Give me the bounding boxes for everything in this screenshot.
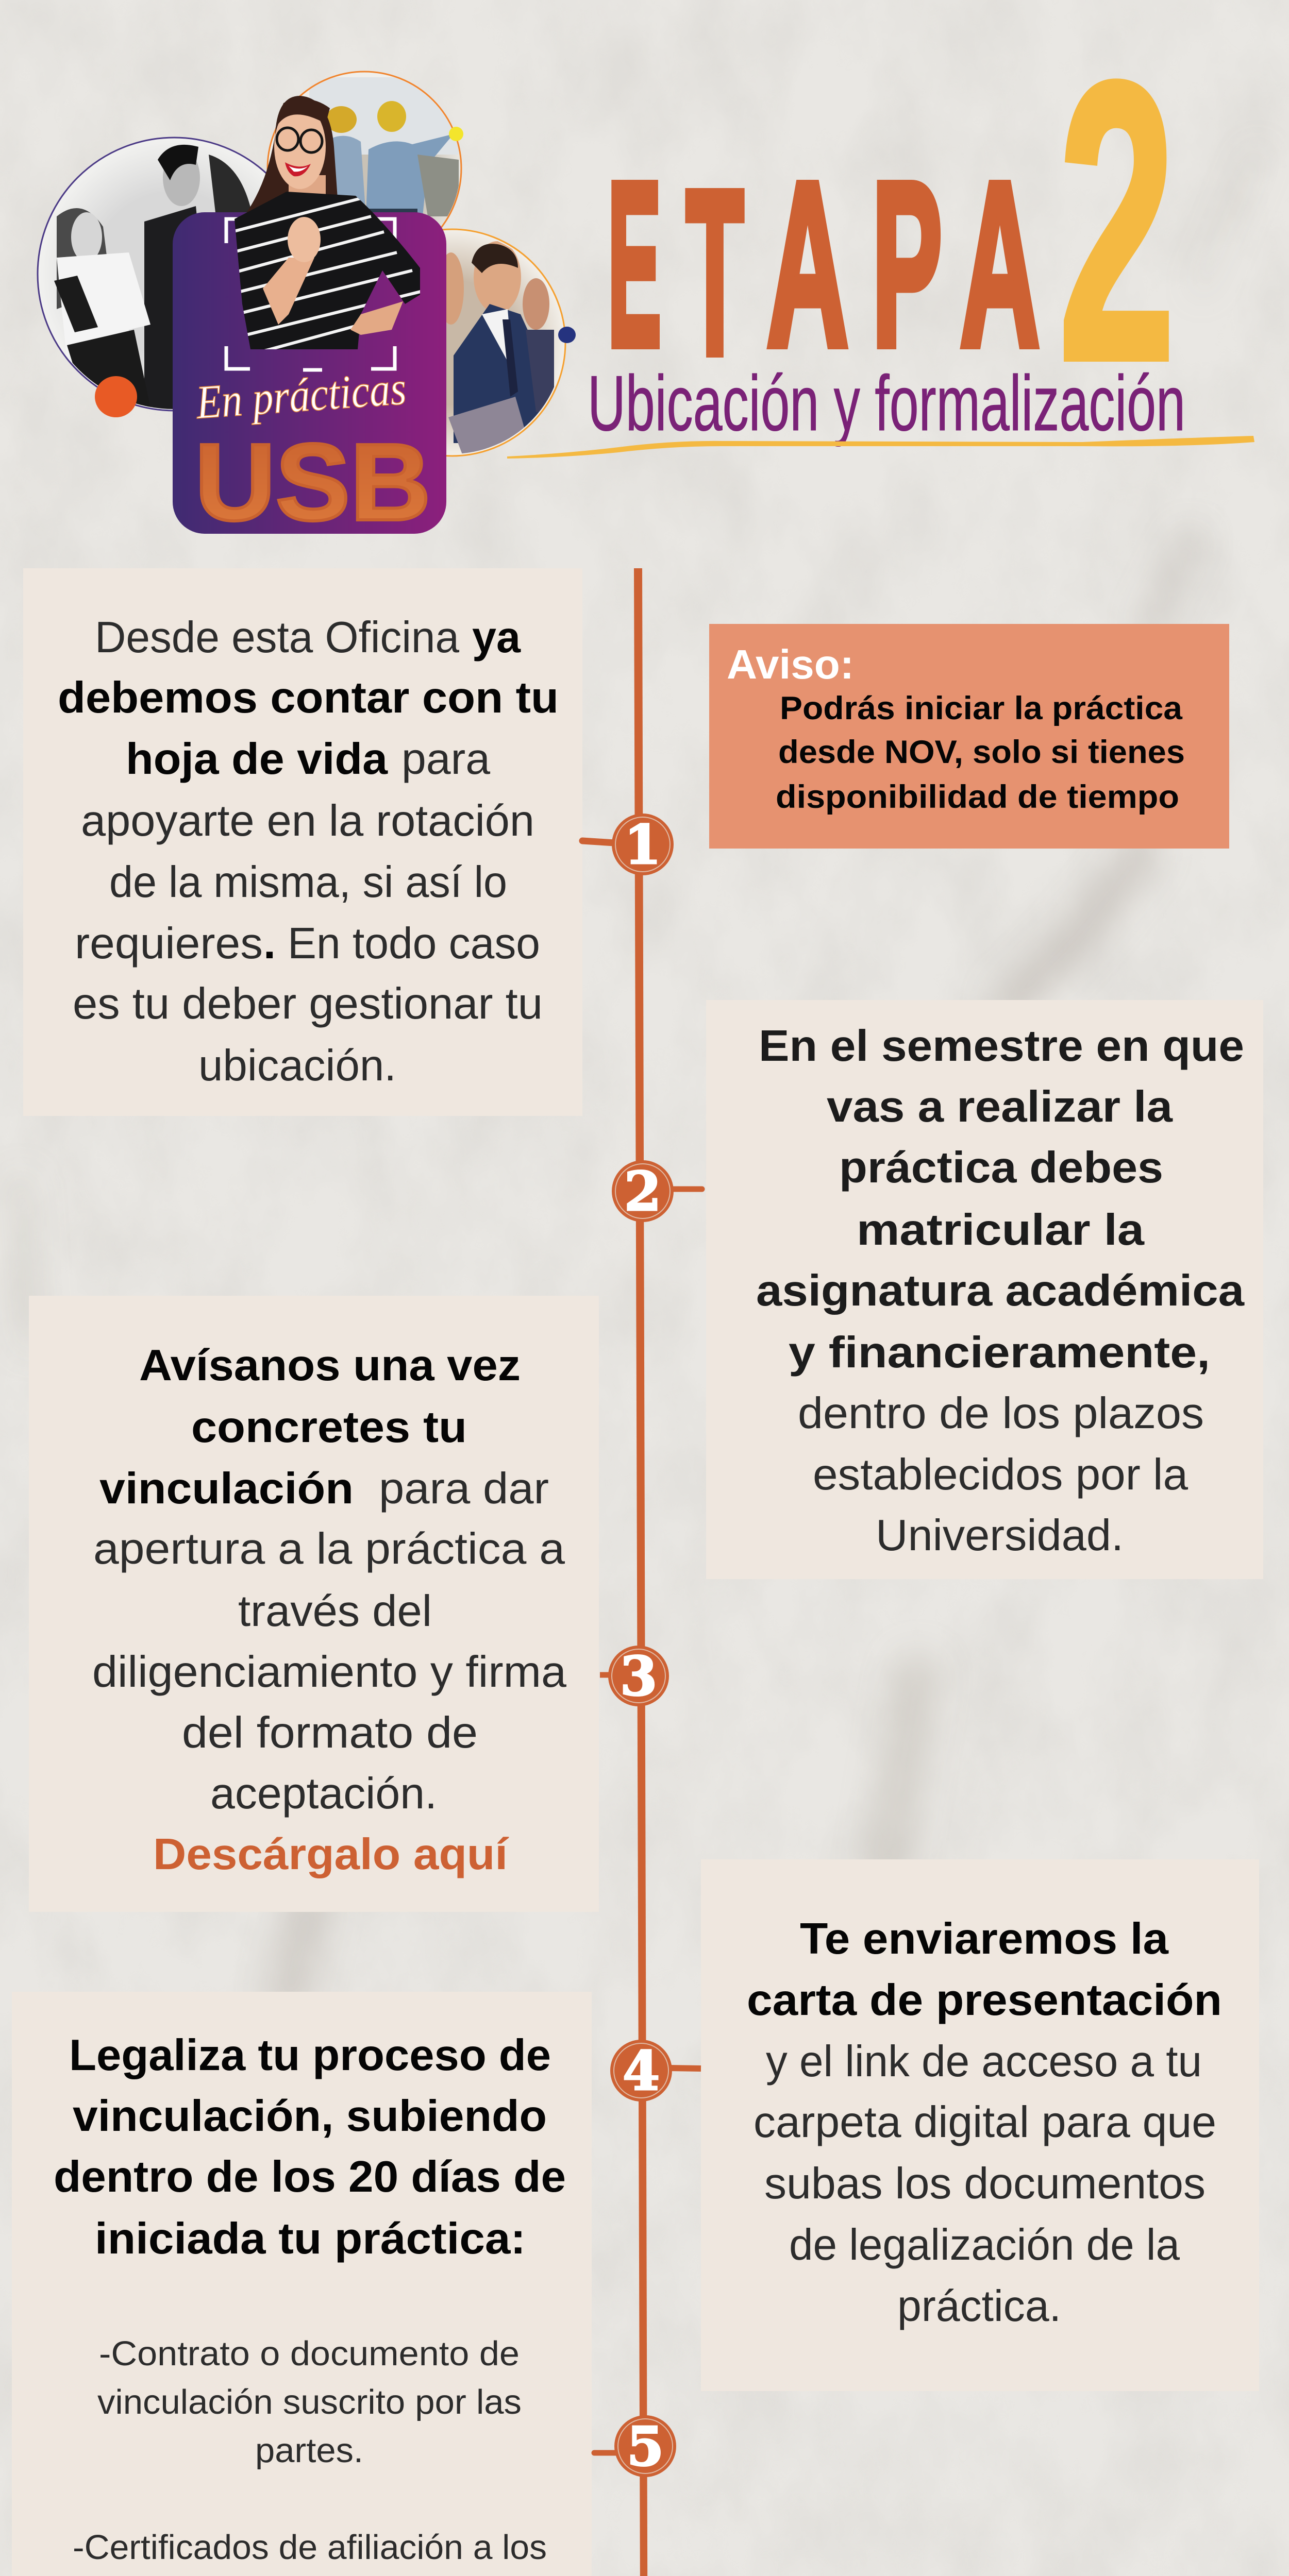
title number 2: 2 xyxy=(1058,0,1176,443)
title ETAPA: P xyxy=(872,134,942,394)
panel 2: matricula: vas a realizar la xyxy=(827,1082,1173,1131)
panel 3: vinculacion: través del xyxy=(238,1587,432,1636)
timeline vertical line xyxy=(634,568,648,2576)
panel 1: hoja de vida: de la misma, si así lo xyxy=(109,858,507,907)
panel 3: vinculacion: vinculación xyxy=(99,1464,354,1513)
download link: Descárgalo aquí xyxy=(153,1830,509,1879)
panel 5: legalizacion: vinculación, subiendo xyxy=(73,2092,547,2141)
panel 5: legalizacion: iniciada tu práctica: xyxy=(95,2214,526,2263)
panel 5: legalizacion: vinculación suscrito por las xyxy=(97,2383,522,2421)
panel 1: hoja de vida: hoja de vida xyxy=(126,735,388,784)
title ETAPA xyxy=(608,134,1040,402)
step marker 4: 4 xyxy=(623,2039,660,2103)
card script text: En prácticas xyxy=(194,362,408,429)
panel 4: carta de presentacion: y el link de acceso a tu xyxy=(766,2037,1202,2086)
panel 2: matricula: En el semestre en que xyxy=(759,1022,1244,1071)
panel 5: legalizacion: partes. xyxy=(255,2431,363,2470)
panel 4: carta de presentacion: carpeta digital para que xyxy=(754,2098,1216,2147)
panel: aviso: Aviso: xyxy=(727,641,854,687)
panel 3: vinculacion: del formato de xyxy=(182,1708,478,1757)
panel 3: vinculacion: para dar xyxy=(379,1464,549,1513)
panel 2: matricula: dentro de los plazos xyxy=(798,1389,1204,1438)
step marker 4 xyxy=(610,2039,701,2103)
panel 1: hoja de vida: ya xyxy=(472,613,521,662)
panel 2: matricula: asignatura académica xyxy=(756,1266,1245,1315)
panel: aviso: disponibilidad de tiempo xyxy=(776,779,1179,815)
panel 4: carta de presentacion: práctica. xyxy=(897,2282,1061,2331)
panel 1: hoja de vida: apoyarte en la rotación xyxy=(81,796,534,845)
panel 1: hoja de vida: para xyxy=(401,735,491,784)
panel 1: hoja de vida: En todo caso xyxy=(288,919,540,968)
panel 1: hoja de vida: es tu deber gestionar tu xyxy=(73,979,543,1028)
panel 2: matricula xyxy=(706,1000,1263,1579)
title ETAPA: E xyxy=(608,134,661,394)
title ETAPA: A xyxy=(767,134,848,394)
panel 4: carta de presentacion xyxy=(701,1859,1259,2391)
panel 3: vinculacion: concretes tu xyxy=(191,1403,467,1452)
subtitle underline xyxy=(507,436,1254,459)
panel 1: hoja de vida: debemos contar con tu xyxy=(58,673,559,722)
panel 4: carta de presentacion: Te enviaremos la xyxy=(800,1914,1169,1963)
panel 4: carta de presentacion: subas los documentos xyxy=(764,2159,1206,2208)
woman pointing xyxy=(232,96,423,355)
step marker 5 xyxy=(594,2415,676,2478)
panel 5: legalizacion: dentro de los 20 días de xyxy=(54,2153,566,2201)
panel 1: hoja de vida xyxy=(23,568,582,1116)
panel 3: vinculacion: diligenciamiento y firma xyxy=(92,1648,567,1697)
panel 3: vinculacion: aceptación. xyxy=(210,1769,437,1818)
panel 3: vinculacion: Avísanos una vez xyxy=(139,1341,521,1390)
yellow dot xyxy=(449,127,463,141)
panel 1: hoja de vida: . xyxy=(263,919,276,968)
text: A xyxy=(960,134,1040,394)
panel 1: hoja de vida: Desde esta Oficina xyxy=(95,613,460,662)
panel 4: carta de presentacion: carta de presentación xyxy=(747,1976,1222,2025)
panel: aviso: Podrás iniciar la práctica xyxy=(780,690,1183,726)
panel 1: hoja de vida: ubicación. xyxy=(198,1041,396,1090)
card corner brackets xyxy=(226,219,395,370)
navy dot xyxy=(558,327,576,343)
panel 1: hoja de vida: requieres xyxy=(75,919,263,968)
card USB wordmark: USB xyxy=(195,421,431,543)
panel 5: legalizacion: -Certificados de afiliación a los xyxy=(73,2528,547,2567)
purple card xyxy=(173,212,446,534)
circle photo: construction workers xyxy=(267,72,461,265)
step marker 1 xyxy=(582,813,674,876)
step marker 2 xyxy=(612,1160,702,1223)
panel 2: matricula: Universidad. xyxy=(876,1511,1124,1560)
panel 3: vinculacion: apertura a la práctica a xyxy=(93,1524,565,1573)
panel 5: legalizacion: -Contrato o documento de xyxy=(99,2334,520,2373)
panel 2: matricula: práctica debes xyxy=(839,1143,1163,1192)
step marker 5: 5 xyxy=(627,2415,664,2478)
panel 2: matricula: matricular la xyxy=(857,1206,1145,1255)
circle photo: business team xyxy=(339,229,565,459)
step marker 3 xyxy=(600,1645,669,1708)
panel 5: legalizacion xyxy=(12,1992,592,2576)
panel: aviso xyxy=(709,624,1229,849)
orange dot xyxy=(95,376,137,417)
title ETAPA: T xyxy=(686,142,744,402)
panel 5: legalizacion: Legaliza tu proceso de xyxy=(69,2031,551,2080)
panel 3: vinculacion xyxy=(29,1296,599,1912)
panel 4: carta de presentacion: de legalización de la xyxy=(789,2221,1180,2269)
step marker 1: 1 xyxy=(624,813,661,876)
header logo illustration xyxy=(38,72,576,543)
step marker 3: 3 xyxy=(620,1645,657,1708)
step marker 2: 2 xyxy=(624,1160,661,1223)
circle photo: colleagues in black and white xyxy=(38,138,311,428)
panel 2: matricula: establecidos por la xyxy=(813,1450,1188,1499)
panel 2: matricula: y financieramente, xyxy=(789,1328,1210,1377)
panel: aviso: desde NOV, solo si tienes xyxy=(778,734,1185,770)
